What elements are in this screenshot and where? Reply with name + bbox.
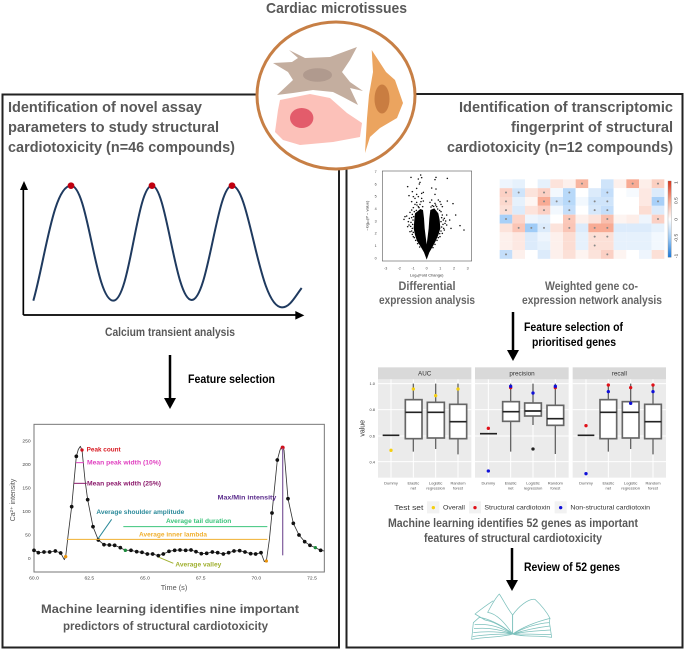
annotation lines: [67, 448, 283, 563]
y axis ticks: 50: [25, 532, 31, 538]
arrow: review of genes: [506, 548, 518, 591]
category labels: Elastic: [602, 481, 614, 486]
label: differential expression: Differential: [398, 281, 456, 293]
volcano axis ticks: -1: [411, 267, 415, 271]
category labels: regression: [524, 485, 542, 490]
x axis ticks: 67.5: [196, 576, 206, 582]
y axis ticks: 0: [28, 556, 31, 562]
category labels: Random: [548, 481, 564, 486]
volcano x axis title: Log₂(Fold Change): [410, 273, 444, 278]
label: review of 52 genes: Review of 52 genes: [524, 562, 620, 574]
annotation labels: Average shoulder amplitude: [96, 510, 185, 516]
category labels: Logistic: [624, 481, 637, 486]
value axis: 1.0: [369, 381, 376, 386]
volcano axis ticks: -3: [384, 267, 387, 271]
volcano axis ticks: 5: [375, 195, 377, 199]
annotation labels: Average inner lambda: [139, 533, 208, 539]
x axis title: Time (s): [161, 583, 187, 592]
heading: right panel: [447, 99, 673, 156]
annotation labels: Max/Min intensity: [218, 495, 277, 501]
label: feature selection of prioritised genes: Feature selection of: [524, 322, 623, 334]
label: differential expression: [379, 281, 475, 307]
category labels: Dummy: [384, 481, 398, 486]
volcano y axis title: −log₁₀(P − value): [365, 200, 370, 231]
annotation labels: Peak count: [87, 448, 121, 454]
category labels: Elastic: [407, 481, 419, 486]
annotation labels: Average valley: [175, 562, 222, 568]
facet: recall: [573, 367, 666, 478]
panel: transcriptomic fingerprint: [346, 94, 682, 648]
volcano axis ticks: 7: [375, 170, 377, 174]
volcano axis ticks: [375, 170, 469, 271]
y axis ticks: 150: [22, 485, 31, 491]
signal line: [34, 446, 324, 562]
category labels: forest: [550, 485, 561, 490]
category labels: net: [411, 485, 417, 490]
chart: machine learning box plots: [359, 367, 666, 513]
caption: 52 genes: Machine learning identifies 52 genes as important: [388, 518, 638, 530]
label: WGCNA: Weighted gene co-: [545, 281, 638, 293]
category labels: net: [508, 485, 514, 490]
value axis: [359, 381, 376, 464]
legend: test set: Non-structural cardiotoxin: [570, 505, 651, 512]
category labels: Logistic: [526, 481, 540, 486]
heatmap colour bar: 0.5: [674, 197, 680, 204]
category labels: [384, 481, 661, 490]
heading: left panel: cardiotoxicity (n=46 compounds): [8, 139, 235, 156]
icon: fibroblast cell: [273, 47, 363, 105]
category labels: regression: [621, 485, 640, 490]
icon: cardiac cells circle: [257, 22, 415, 169]
facet: precision: [475, 367, 569, 478]
category labels: Random: [450, 481, 466, 486]
heatmap colour bar: -0.5: [674, 233, 680, 242]
caption: nine important predictors: Machine learning identifies nine important: [41, 604, 299, 616]
caption: nine important predictors: predictors of structural cardiotoxicity: [63, 621, 269, 633]
annotation labels: [87, 448, 277, 568]
data points: [32, 455, 322, 557]
x axis ticks: [29, 576, 317, 582]
label: feature selection: Feature selection: [188, 374, 275, 386]
facet: precision: precision: [509, 371, 535, 378]
heading: left panel: Identification of novel assay: [8, 99, 203, 116]
category labels: forest: [648, 485, 659, 490]
volcano axis ticks: 2: [453, 267, 455, 271]
y axis title: Ca²⁺ intensity: [10, 478, 17, 521]
heading: left panel: [8, 99, 235, 156]
label: WGCNA: expression network analysis: [522, 295, 662, 307]
facet: AUC: [378, 367, 471, 478]
volcano axis ticks: 0: [375, 256, 377, 260]
volcano axis ticks: 0: [426, 267, 428, 271]
label: feature selection of prioritised genes: prioritised genes: [532, 337, 616, 349]
category labels: Logistic: [429, 481, 442, 486]
label: differential expression: expression analysis: [379, 295, 475, 307]
volcano axis ticks: 3: [375, 219, 377, 223]
x axis ticks: 70.0: [251, 576, 261, 582]
value axis: 0.4: [369, 459, 376, 464]
y axis ticks: 100: [22, 509, 31, 515]
chart: volcano plot: [365, 170, 472, 278]
icon: open book: [472, 594, 552, 639]
facet: AUC: AUC: [418, 371, 432, 378]
label: calcium transient analysis: Calcium transient analysis: [105, 327, 235, 339]
chart: annotated calcium trace: [10, 424, 324, 592]
x axis ticks: 60.0: [29, 576, 39, 582]
x axis ticks: 72.5: [307, 576, 317, 582]
volcano axis ticks: 1: [375, 244, 377, 248]
title: cardiac microtissues: Cardiac microtissues: [266, 0, 407, 17]
value axis: 0.6: [369, 433, 376, 438]
category labels: Dummy: [579, 481, 593, 486]
icon: endothelial cell: [275, 94, 362, 145]
chart: correlation heatmap: [500, 179, 680, 259]
label: feature selection of prioritised genes: [524, 322, 623, 349]
caption: 52 genes: [388, 518, 638, 545]
volcano axis ticks: 6: [375, 182, 377, 186]
arrow: feature selection: [164, 355, 176, 409]
y axis ticks: 250: [22, 438, 31, 444]
label: WGCNA: [522, 281, 662, 307]
heading: left panel: parameters to study structural: [8, 119, 219, 136]
legend: test set: [394, 501, 651, 513]
heatmap colour bar: -1: [674, 254, 680, 258]
y axis ticks: 200: [22, 462, 31, 468]
volcano axis ticks: 4: [375, 207, 377, 211]
category labels: Random: [645, 481, 661, 486]
volcano dense cloud: [414, 208, 440, 260]
chart: calcium transient: [20, 181, 304, 320]
caption: nine important predictors: [41, 604, 299, 633]
category labels: forest: [453, 485, 464, 490]
value axis: 0.8: [369, 407, 376, 412]
volcano axis ticks: -2: [398, 267, 401, 271]
volcano scattered points: [403, 174, 465, 248]
category labels: net: [606, 485, 612, 490]
category labels: Dummy: [481, 481, 495, 486]
volcano axis ticks: 2: [375, 232, 377, 236]
annotation labels: Mean peak width (25%): [87, 481, 161, 487]
volcano axis ticks: 3: [467, 267, 469, 271]
heading: right panel: Identification of transcriptomic: [459, 99, 673, 116]
heading: right panel: cardiotoxicity (n=12 compounds): [447, 139, 673, 156]
highlighted points: [64, 446, 317, 563]
y axis ticks: [22, 438, 31, 562]
legend: test set: Structural cardiotoxin: [484, 505, 551, 512]
legend: test set: Test set: [394, 503, 424, 512]
heading: right panel: fingerprint of structural: [511, 119, 673, 136]
volcano axis ticks: 1: [439, 267, 441, 271]
x axis ticks: 62.5: [84, 576, 94, 582]
annotation labels: Mean peak width (10%): [87, 461, 161, 467]
heatmap colour bar: 0: [674, 218, 680, 221]
icon: cardiomyocyte cell: [365, 50, 403, 153]
facet: recall: recall: [612, 371, 627, 378]
arrow: feature selection of genes: [507, 312, 519, 361]
heatmap colour bar: [668, 181, 680, 258]
annotation labels: Average tail duration: [166, 519, 232, 525]
value axis: value: [359, 420, 366, 437]
panel: novel assay parameters: [2, 94, 339, 648]
x axis ticks: 65.0: [140, 576, 150, 582]
caption: 52 genes: features of structural cardiotoxicity: [424, 533, 603, 545]
legend: test set: Overall: [443, 505, 465, 512]
category labels: Elastic: [505, 481, 517, 486]
heatmap colour bar: 1: [674, 181, 680, 184]
category labels: regression: [426, 485, 445, 490]
